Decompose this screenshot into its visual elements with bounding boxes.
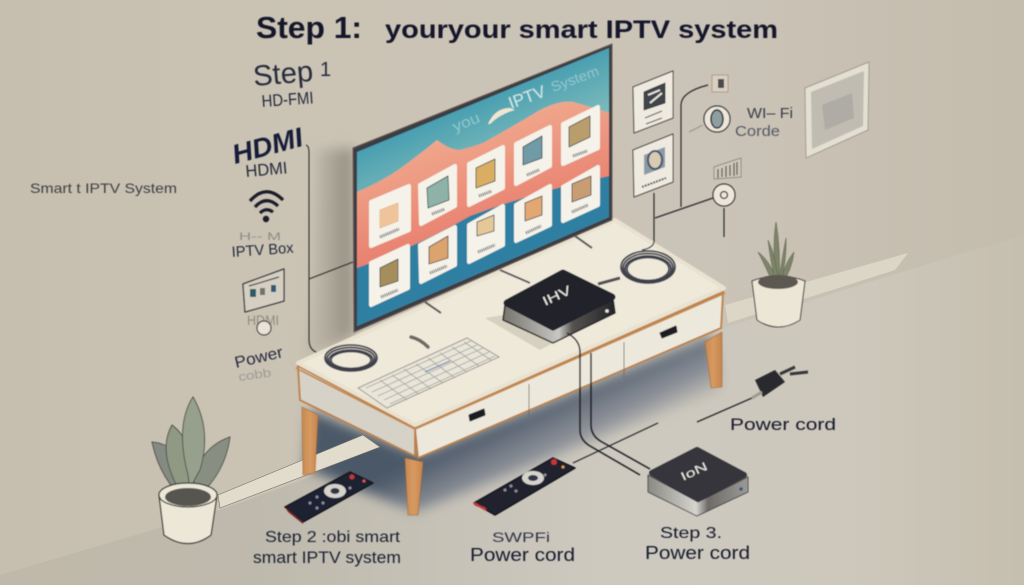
cable from box to coil (598, 278, 620, 284)
title (256, 10, 778, 45)
faint label: HDMI: HDMI (247, 312, 279, 328)
label: corde: Corde (735, 123, 780, 140)
label: power: Power (233, 344, 285, 372)
wall icon small (712, 75, 728, 92)
leaves (758, 222, 794, 286)
TV stand feet (425, 236, 592, 313)
plug tail and prongs (780, 367, 808, 374)
wall icon barcode (714, 158, 741, 179)
screen caption: System (549, 63, 601, 95)
plant right (752, 222, 805, 327)
desk (296, 220, 725, 515)
right cable coil (621, 251, 675, 283)
desk front left side (298, 366, 415, 456)
label: step 1: Step (252, 56, 314, 93)
tile icons (380, 116, 591, 287)
label: HDMI: HDMI (245, 158, 288, 181)
pot (752, 276, 805, 327)
label: power cord right: Power cord (730, 415, 836, 434)
desk top (298, 220, 724, 425)
icon: circle (257, 321, 271, 335)
box side (648, 475, 748, 516)
pot (159, 495, 217, 544)
remote control left (285, 472, 373, 524)
icon: card (243, 269, 284, 312)
drawer handles (469, 326, 677, 421)
TV screen (357, 48, 609, 326)
plug body (755, 370, 785, 397)
desk legs (302, 332, 722, 515)
plant left (152, 397, 230, 544)
screen caption: IPTV (506, 82, 549, 113)
skirting board right (725, 253, 908, 323)
faint label: H-- M (239, 231, 281, 243)
tile captions (380, 151, 588, 297)
label: wifi power cord: SWPFi (492, 529, 550, 545)
icon: wifi (250, 192, 283, 222)
wall card 1 (633, 71, 673, 133)
keyboard (358, 338, 499, 408)
box LED (605, 309, 609, 313)
title: youryour smart IPTV system (385, 16, 778, 44)
faint label: cobb: cobb (237, 365, 272, 384)
side label: smart IPTV system: Smart t IPTV System (30, 180, 177, 196)
floor (0, 235, 1024, 585)
box LED (739, 487, 743, 491)
label: HDMI bold: HDMI (229, 122, 307, 170)
desk front with drawers (415, 292, 723, 458)
label: Wi-Fi: WI– Fi (747, 105, 793, 122)
connector lines left (306, 145, 353, 354)
wall card 2 (633, 134, 673, 197)
box label: IHV (540, 282, 574, 309)
leaves (152, 397, 230, 503)
label: step 3: Power cord (645, 543, 750, 563)
box side (503, 299, 615, 343)
box top (507, 273, 612, 327)
shadow under the desk (305, 335, 722, 512)
label: step 3 (645, 525, 750, 563)
label: wifi power cord: Power cord (470, 545, 575, 565)
skirting board left (218, 435, 380, 508)
label: wifi power cord (470, 529, 575, 565)
IPTV box on floor (648, 450, 748, 516)
screen mountains (357, 102, 609, 326)
small object on desk (411, 337, 428, 347)
label: IPTV Box: IPTV Box (231, 240, 295, 261)
drawer dividers (529, 342, 624, 417)
label: step 2 (253, 529, 401, 567)
box shadow (485, 315, 553, 350)
cables to lower box (567, 333, 658, 475)
wall picture frame (805, 62, 869, 158)
screen caption: you (450, 109, 482, 136)
connector lines right (642, 85, 724, 250)
desk edge (296, 293, 725, 429)
left annotation column (229, 56, 331, 384)
label: step 3: Step 3. (660, 525, 722, 542)
left cable coil (325, 345, 377, 371)
app tiles (371, 107, 598, 305)
box top (652, 450, 744, 499)
TV bezel (353, 44, 612, 332)
cord (697, 398, 752, 422)
screen caption (450, 63, 601, 136)
title: Step 1: (256, 10, 362, 45)
label: step number: 1 (320, 59, 331, 81)
wall icon circle small (713, 184, 735, 206)
IPTV box on desk (485, 273, 615, 350)
remote control right (474, 458, 575, 515)
power plug (697, 367, 808, 422)
shadow on wall beside the TV (300, 148, 353, 362)
label: step 2: Step 2 :obi smart (265, 529, 401, 546)
label: HD-FMI: HD-FMI (261, 88, 314, 111)
label: step 2: smart IPTV system (253, 548, 401, 567)
television (353, 44, 612, 332)
box label: IoN (678, 459, 710, 484)
wall icon circle (704, 106, 730, 132)
